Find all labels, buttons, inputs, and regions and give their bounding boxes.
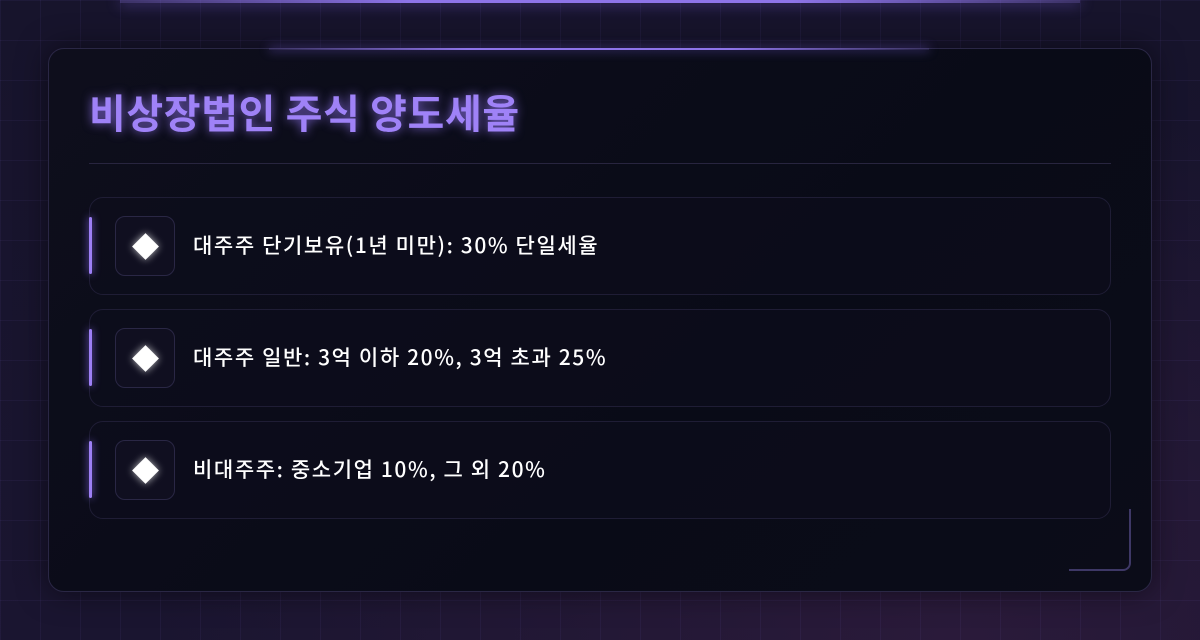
text: 대주주 일반: 3억 이하 20%, 3억 초과 25% xyxy=(193,342,607,372)
title: 비상장법인 주식 양도세율 xyxy=(89,82,520,140)
item: general xyxy=(89,309,1111,407)
icon: diamond xyxy=(115,328,175,388)
item: minor xyxy=(89,421,1111,519)
icon: diamond xyxy=(115,216,175,276)
panel: card xyxy=(48,48,1152,592)
item: short-term xyxy=(89,197,1111,295)
text: 대주주 단기보유(1년 미만): 30% 단일세율 xyxy=(193,230,599,260)
text: 비대주주: 중소기업 10%, 그 외 20% xyxy=(193,454,546,484)
icon: diamond xyxy=(115,440,175,500)
